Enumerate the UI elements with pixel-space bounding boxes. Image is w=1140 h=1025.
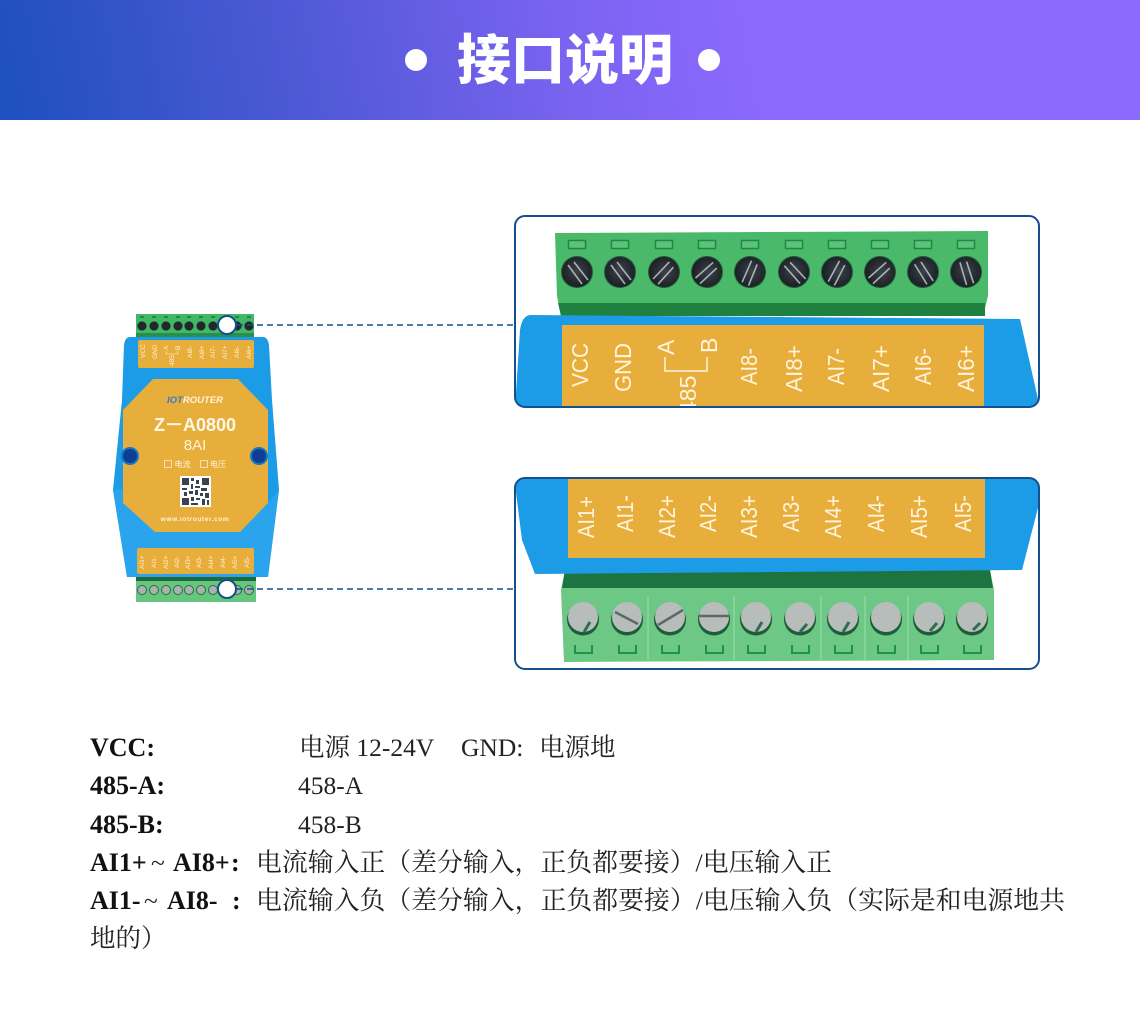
AI+ row: : — [231, 848, 240, 877]
485-A row — [90, 771, 364, 800]
bottom label strip: AI2+ — [163, 555, 170, 569]
green terminal block — [561, 570, 994, 662]
dashed connector top — [237, 324, 515, 326]
orange label strip — [562, 325, 984, 414]
orange label strip: B — [696, 338, 722, 353]
bottom label strip: AI1+ — [139, 555, 146, 569]
mode checkboxes: 电压 — [210, 459, 226, 469]
VCC row — [90, 733, 616, 762]
top label strip: AI8- — [187, 346, 194, 358]
mode checkboxes — [164, 459, 226, 469]
orange label strip: AI1+ — [573, 496, 599, 538]
mode checkboxes: 电流 — [174, 459, 190, 469]
AI+ row: 电流输入正（差分输入，正负都要接）/电压输入正 — [256, 848, 832, 877]
top label strip: AI6+ — [246, 345, 253, 359]
orange label strip: AI7- — [823, 348, 849, 385]
blue housing — [515, 315, 1040, 408]
dashed connector bottom — [237, 588, 515, 590]
VCC row: 电源 12-24V — [299, 733, 435, 762]
AI+ row: ~ — [151, 848, 165, 877]
orange label strip: AI5- — [950, 495, 976, 532]
title: 接口说明 — [457, 16, 673, 95]
AI- row: 地的） — [90, 924, 167, 953]
top label strip: AI7+ — [222, 345, 229, 359]
panel: bottom terminal close-up — [514, 477, 1040, 669]
485-B row — [90, 810, 362, 839]
central faceplate — [123, 379, 268, 532]
bottom label strip: AI5+ — [232, 555, 239, 569]
orange label strip: AI2- — [695, 495, 721, 532]
orange label strip: AI3+ — [736, 495, 762, 538]
VCC row: VCC: — [90, 733, 155, 762]
model subtitle: 8AI — [184, 437, 206, 454]
AI- row: ~ — [144, 886, 158, 915]
QR code — [180, 476, 211, 507]
brand logo: IOTROUTER — [167, 395, 223, 406]
orange label strip — [568, 477, 985, 558]
bottom label strip — [137, 548, 254, 574]
top label strip: B — [175, 346, 182, 350]
AI- row — [90, 886, 1065, 953]
AI- row: 电流输入负（差分输入，正负都要接）/电压输入负（实际是和电源地共 — [256, 886, 1065, 915]
orange label strip: AI8- — [736, 348, 762, 385]
VCC row: 电源地 — [539, 733, 616, 762]
top label strip: 485 — [169, 355, 176, 366]
485-B row: 485-B: — [90, 810, 164, 839]
title bullet right — [698, 49, 720, 71]
mounting screw left — [121, 447, 139, 465]
top label strip: AI7- — [210, 346, 217, 358]
callout marker bottom — [218, 580, 236, 598]
bottom label strip: AI4+ — [208, 555, 215, 569]
top label strip: VCC — [140, 344, 147, 358]
device body — [113, 337, 279, 577]
orange label strip: AI8+ — [781, 345, 807, 392]
orange label strip: GND — [610, 343, 636, 392]
orange label strip: AI4+ — [820, 495, 846, 538]
orange label strip: AI1- — [612, 495, 638, 532]
orange label strip: 485 — [675, 376, 701, 414]
AI- row: AI1- — [90, 886, 141, 915]
bottom terminal block — [136, 576, 256, 602]
panel: top terminal close-up — [515, 216, 1040, 414]
device illustration — [113, 314, 279, 602]
mounting screw right — [250, 447, 268, 465]
orange label strip: AI4- — [863, 495, 889, 532]
bottom label strip: AI3- — [196, 556, 203, 568]
green terminal block — [555, 231, 988, 316]
orange label strip: AI6- — [910, 348, 936, 385]
485-A row: 458-A — [298, 771, 364, 800]
top label strip: AI8+ — [199, 345, 206, 359]
485-B row: 458-B — [298, 810, 362, 839]
callout marker top — [218, 316, 236, 334]
orange label strip: A — [653, 339, 679, 355]
AI- row: : — [232, 886, 241, 915]
bottom label strip: AI1- — [151, 556, 158, 568]
VCC row: GND: — [461, 733, 523, 762]
485-A row: 485-A: — [90, 771, 165, 800]
top label strip — [138, 340, 254, 368]
orange label strip: AI6+ — [953, 345, 979, 392]
bottom label strip: AI4- — [220, 556, 227, 568]
bottom label strip: AI5- — [244, 556, 251, 568]
AI- row: AI8- — [167, 886, 218, 915]
model name: Z－A0800 — [154, 415, 236, 435]
bottom label strip: AI2- — [174, 556, 181, 568]
pin description text — [90, 733, 1065, 953]
AI+ row: AI8+ — [173, 848, 230, 877]
top label strip: GND — [152, 344, 159, 359]
blue housing — [514, 477, 1040, 574]
header banner — [0, 0, 1140, 120]
orange label strip: VCC — [567, 343, 593, 387]
orange label strip: AI3- — [778, 495, 804, 532]
bottom label strip: AI3+ — [185, 555, 192, 569]
top terminal block — [136, 314, 254, 337]
orange label strip: AI2+ — [654, 495, 680, 538]
AI+ row: AI1+ — [90, 848, 147, 877]
top label strip: AI6- — [234, 346, 241, 358]
top label strip: A — [163, 345, 170, 350]
title bullet left — [405, 49, 427, 71]
orange label strip: AI7+ — [868, 345, 894, 392]
orange label strip: AI5+ — [906, 495, 932, 538]
website: www.iotrouter.com — [160, 516, 229, 523]
